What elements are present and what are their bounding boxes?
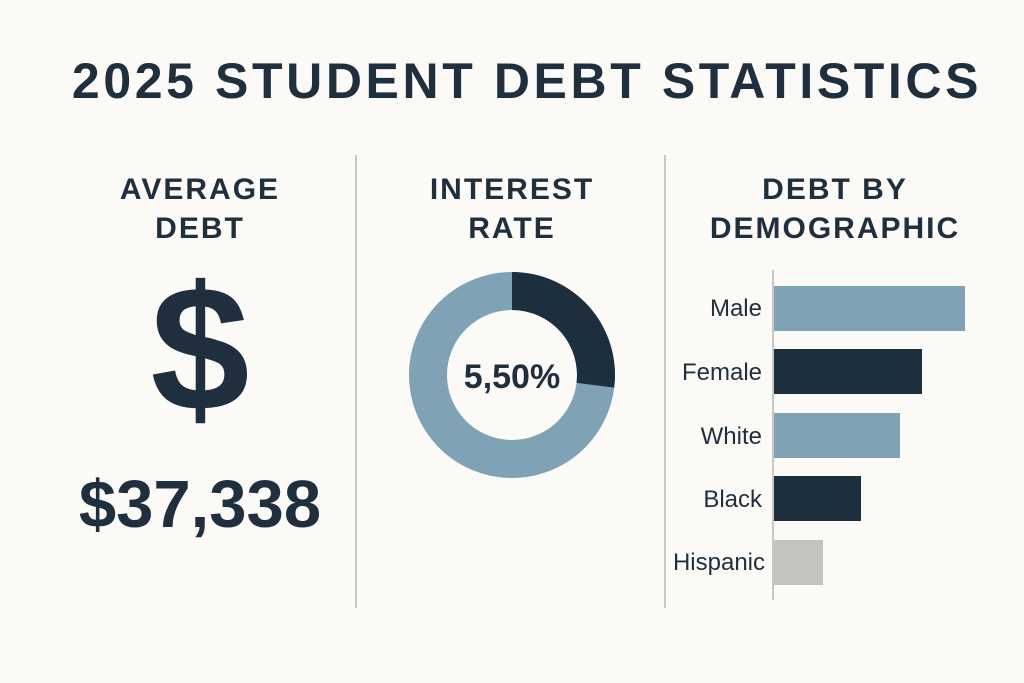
bar chart: White <box>701 423 762 450</box>
heading: interest rate: RATE <box>468 212 556 245</box>
heading: average debt: AVERAGE <box>120 173 280 206</box>
panel: average debt <box>79 173 321 542</box>
icon: dollar sign: $ <box>150 249 250 448</box>
heading: average debt: DEBT <box>155 212 245 245</box>
heading: interest rate: INTEREST <box>430 173 594 206</box>
donut chart <box>428 272 615 459</box>
donut label: 5,50% <box>464 358 560 396</box>
bar chart: Black <box>703 486 763 513</box>
heading: debt by demographic: DEBT BY <box>762 173 908 206</box>
bar chart <box>673 270 965 600</box>
bar chart: Female <box>682 359 762 386</box>
heading: debt by demographic: DEMOGRAPHIC <box>710 212 960 245</box>
value: average debt: $37,338 <box>79 467 321 542</box>
bar chart: Hispanic <box>673 549 765 576</box>
bar chart: Male <box>710 295 762 322</box>
panel: interest rate <box>428 173 615 459</box>
panel: debt by demographic <box>673 173 965 600</box>
title: 2025 STUDENT DEBT STATISTICS <box>72 53 982 109</box>
